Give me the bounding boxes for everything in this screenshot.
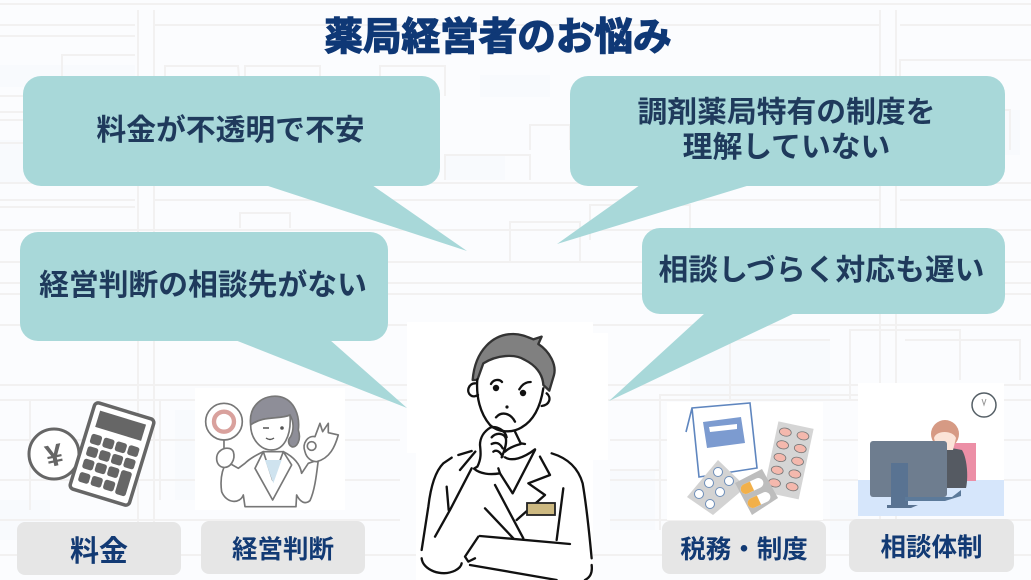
label: tax and system: 税務・制度: [680, 536, 808, 564]
label: management decisions: [201, 521, 365, 574]
bubble text: management advice: 経営判断の相談先がない: [39, 269, 367, 302]
label: tax and system: [662, 521, 826, 574]
bubble text: slow response: 相談しづらく対応も遅い: [658, 254, 984, 287]
bubble text: pharmacy system: 調剤薬局特有の制度を: [638, 96, 935, 129]
title: 薬局経営者のお悩み: [324, 16, 672, 59]
label: pricing: 料金: [70, 536, 128, 568]
label: consultation structure: 相談体制: [880, 534, 982, 562]
label: management decisions: 経営判断: [232, 536, 334, 564]
icon: calculator and yen coin: ¥: [42, 436, 67, 474]
bubble text: pricing: 料金が不透明で不安: [96, 114, 365, 147]
label: consultation structure: [849, 519, 1014, 572]
label: pricing: [17, 522, 181, 575]
bubble text: pharmacy system: [638, 96, 935, 164]
bubble text: pharmacy system: 理解していない: [683, 131, 890, 164]
